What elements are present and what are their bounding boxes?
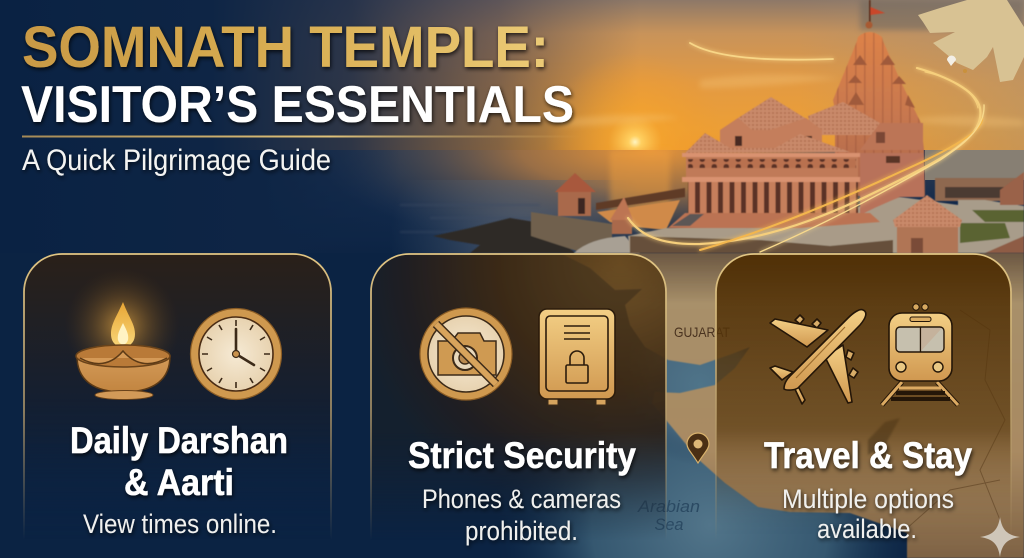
panel: strict security: [371, 254, 666, 546]
temple grounds: [628, 172, 1024, 253]
main hall: [668, 153, 924, 228]
title rule: [22, 136, 582, 138]
heading: travel and stay: Travel & Stay: [764, 435, 972, 476]
text: phones and cameras prohibited: prohibited.: [465, 516, 578, 546]
panel: daily darshan and aarti: [24, 254, 331, 540]
title: [21, 15, 574, 134]
text: phones and cameras prohibited: [422, 484, 621, 546]
main pyramidal dome: [730, 97, 812, 132]
subtitle: A Quick Pilgrimage Guide: [22, 144, 331, 177]
text: multiple options available: Multiple options: [782, 484, 954, 514]
icon: oil lamp: [64, 268, 180, 400]
mini map of Gujarat with pin: [918, 0, 1024, 82]
text: multiple options available: [782, 484, 954, 544]
small shrine: [893, 195, 962, 253]
icon: locker safe: [539, 309, 615, 405]
icon: airplane: [770, 310, 866, 404]
map pin: [687, 433, 709, 463]
title line 2: VISITOR’S ESSENTIALS: [21, 76, 574, 134]
map label: Gujarat: GUJARAT: [674, 324, 730, 340]
map label: Arabian Sea: Arabian: [637, 498, 700, 516]
text: multiple options available: available.: [817, 514, 917, 544]
icon: train: [882, 304, 958, 405]
map label: Arabian Sea: [637, 498, 700, 534]
temple flag: [866, 0, 885, 28]
text: view times online: View times online.: [83, 509, 277, 539]
right dome: [808, 102, 880, 135]
icon: sparkle: [980, 517, 1020, 557]
map label: Arabian Sea: Sea: [654, 516, 684, 534]
heading: daily darshan and aarti: Daily Darshan: [70, 420, 288, 461]
icon: clock: [190, 308, 282, 400]
panel: travel and stay: [716, 254, 1011, 544]
main tower (shikhara): [833, 32, 925, 196]
text: phones and cameras prohibited: Phones & cameras: [422, 484, 621, 514]
title line 1: SOMNATH TEMPLE:: [22, 15, 549, 80]
illustration: Somnath temple: [668, 0, 962, 253]
shoreline with rocks and pavilion: [433, 173, 685, 253]
heading: strict security: Strict Security: [408, 435, 636, 476]
heading: daily darshan and aarti: [70, 420, 288, 503]
golden light swooshes: [628, 43, 984, 252]
upper storey: [685, 118, 923, 153]
map of the Gujarat coast: [560, 253, 1024, 558]
heading: daily darshan and aarti: & Aarti: [124, 462, 234, 503]
icon: no camera: [420, 308, 512, 400]
